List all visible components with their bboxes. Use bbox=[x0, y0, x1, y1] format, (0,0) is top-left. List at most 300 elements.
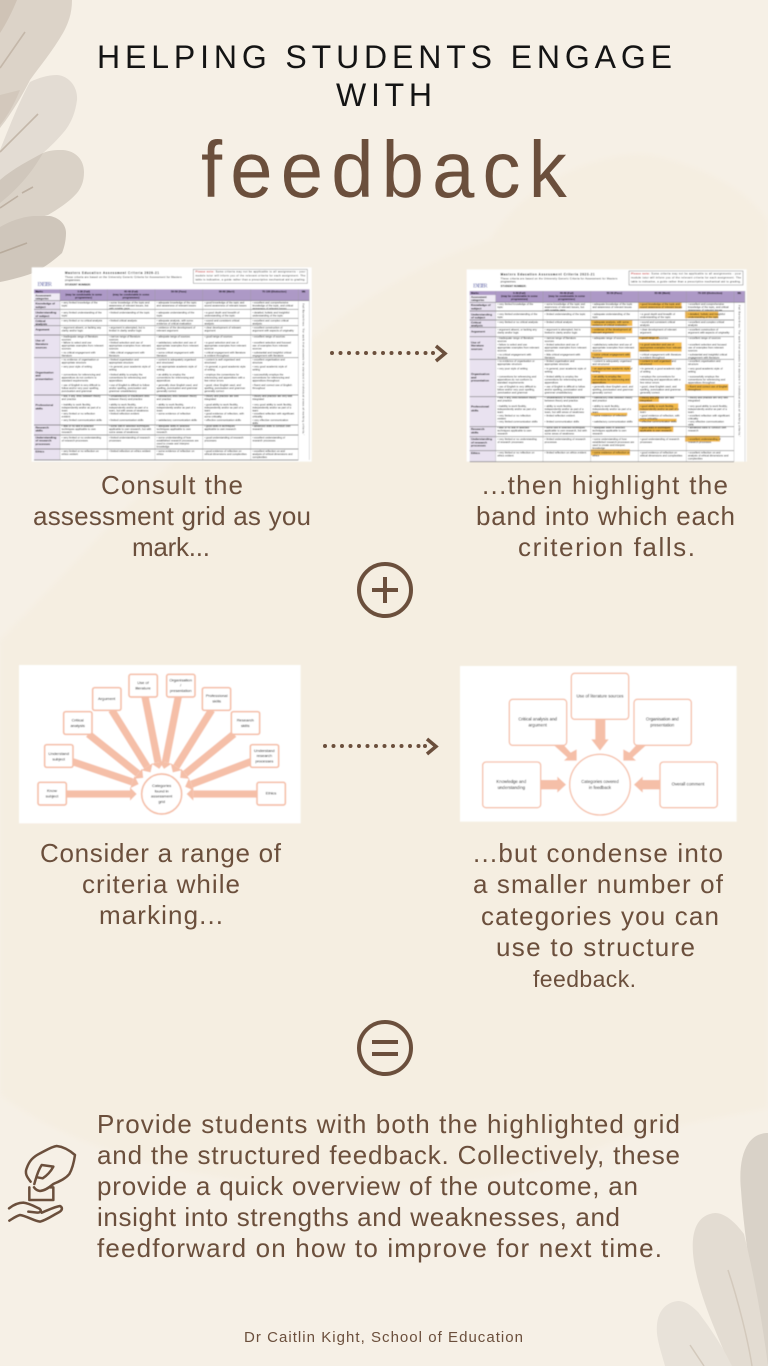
assessment grid: • limited understanding of the topic bbox=[109, 310, 150, 314]
highlighted assessment grid: • some skill in selected techniques bbox=[545, 426, 586, 430]
assessment grid: appendices do not conform to bbox=[62, 376, 97, 380]
assessment grid: of research processes bbox=[62, 438, 88, 442]
assessment grid: • limited selection and use of bbox=[109, 341, 143, 345]
highlighted assessment grid: • little critical engagement with bbox=[545, 352, 581, 356]
assessment grid: processes bbox=[204, 438, 217, 442]
assessment grid: of subject bbox=[35, 314, 49, 318]
highlighted assessment grid: throughout bbox=[688, 388, 701, 392]
assessment grid: literature bbox=[157, 354, 168, 358]
highlighted assessment grid: • good, clear English used, and bbox=[640, 385, 677, 389]
highlighted assessment grid: (may be condonable in some bbox=[548, 294, 585, 298]
assessment grid: • good range of sources bbox=[204, 334, 233, 338]
highlighted assessment grid: Professional bbox=[471, 405, 489, 409]
assessment grid: Please note: Some criteria may not be applicable to all assignments - your bbox=[195, 270, 305, 274]
title: HELPING STUDENTS ENGAGE bbox=[97, 39, 672, 75]
highlighted assessment grid: • very limited or no understanding bbox=[497, 437, 537, 441]
assessment grid: team bbox=[204, 408, 211, 412]
assessment grid bbox=[32, 267, 312, 462]
highlighted assessment grid: • content is well organised and bbox=[640, 359, 676, 363]
assessment grid: Use of bbox=[35, 339, 44, 343]
assessment grid: and practice bbox=[157, 397, 172, 401]
assessment grid: • very poor style of writing bbox=[62, 365, 92, 369]
highlighted assessment grid: literature bbox=[471, 344, 484, 348]
highlighted assessment grid: of research bbox=[471, 440, 487, 444]
assessment grid: argument with aspects of originality bbox=[252, 329, 294, 333]
caption: consult the grid: assessment grid as you bbox=[33, 501, 311, 531]
caption: condense into categories bbox=[473, 838, 724, 992]
assessment grid: Fail Borderlines: 'For work that exceeds the standard in individual areas of marking criteria.' bbox=[302, 303, 306, 435]
watercolour wash bbox=[0, 154, 768, 1187]
assessment grid: appropriate examples from relevant bbox=[62, 344, 104, 348]
diagram: categories in assessment grid: Argument bbox=[98, 696, 116, 701]
highlighted assessment grid: appropriate examples from relevant bbox=[592, 345, 634, 349]
highlighted assessment grid: • very effective communication bbox=[688, 420, 724, 424]
highlighted assessment grid: processes bbox=[640, 440, 653, 444]
assessment grid: Knowledge of bbox=[35, 301, 55, 305]
highlighted assessment grid: some areas of weakness bbox=[545, 432, 575, 436]
highlighted assessment grid: writing bbox=[592, 369, 601, 373]
highlighted assessment grid: • adequate range of sources bbox=[592, 336, 626, 340]
assessment grid: categories bbox=[35, 296, 49, 300]
assessment grid: and awareness of relevant issues bbox=[157, 303, 197, 307]
assessment grid: • good evidence of reflection, with bbox=[204, 412, 244, 416]
summary text: insight into strengths and weaknesses, and bbox=[97, 1202, 620, 1232]
assessment grid: sources bbox=[109, 347, 119, 351]
assessment grid: topic bbox=[157, 313, 163, 317]
highlighted assessment grid: • limited selection and use of bbox=[545, 342, 579, 346]
assessment grid: understanding of the topic bbox=[204, 313, 236, 317]
assessment grid: appropriate examples from relevant bbox=[204, 344, 246, 348]
assessment grid: conventions for referencing and bbox=[157, 376, 194, 380]
assessment grid: • very limited understanding of the bbox=[62, 310, 102, 314]
caption: condense into categories: categories you can bbox=[481, 901, 719, 931]
highlighted assessment grid: • good knowledge of the topic and bbox=[640, 302, 680, 306]
highlighted assessment grid: spelling, punctuation and grammar bbox=[592, 388, 633, 392]
highlighted assessment grid: literature bbox=[497, 355, 508, 359]
assessment grid: • substantial and insightful critical bbox=[252, 351, 292, 355]
highlighted assessment grid: • failure to select and use bbox=[497, 342, 528, 346]
assessment grid: • very limited knowledge of the bbox=[62, 300, 98, 304]
assessment grid: programmes. bbox=[65, 278, 81, 282]
assessment grid: • some evidence of reflection on bbox=[157, 449, 195, 453]
caption: condense into categories: ...but condense into bbox=[473, 838, 723, 868]
summary text: Provide students with both the highlighted grid bbox=[97, 1109, 680, 1139]
highlighted assessment grid: 70-100 (Distinction) bbox=[698, 291, 722, 295]
highlighted assessment grid: established research processes are bbox=[592, 440, 635, 444]
assessment grid: • theory and practice are very well bbox=[252, 394, 293, 398]
assessment grid: appendices bbox=[109, 379, 123, 383]
highlighted assessment grid: • limited critical analysis bbox=[545, 320, 573, 324]
dotted arrow: diagrams bbox=[323, 739, 436, 754]
assessment grid: independently and/or as part of a bbox=[252, 405, 292, 409]
assessment grid: • excellent organisation and bbox=[252, 357, 285, 361]
assessment grid: structured bbox=[204, 360, 217, 364]
highlighted assessment grid: • excellent organisation and bbox=[688, 359, 721, 363]
assessment grid: • very limited or no reflection on bbox=[62, 449, 99, 453]
assessment grid: • good skills in techniques bbox=[204, 424, 235, 428]
assessment grid: (may be condonable in some bbox=[65, 292, 102, 296]
caption: consider a range of criteria bbox=[40, 838, 282, 930]
assessment grid: literature bbox=[35, 342, 48, 346]
diagram: categories covered in feedback: understanding bbox=[498, 785, 526, 790]
assessment grid: conventions for referencing and bbox=[252, 376, 290, 380]
assessment grid: • detailed, holistic and insightful bbox=[252, 310, 290, 314]
assessment grid: • argument is attempted, but is bbox=[109, 326, 146, 330]
assessment grid: Research bbox=[35, 425, 49, 429]
highlighted assessment grid: evident bbox=[497, 416, 506, 420]
assessment grid: Understanding bbox=[35, 435, 57, 439]
assessment grid: Professional bbox=[35, 403, 53, 407]
assessment grid: topic bbox=[62, 313, 68, 317]
highlighted assessment grid: • adequate knowledge of the topic bbox=[592, 302, 633, 306]
caption: highlight the band: criterion falls. bbox=[518, 532, 695, 562]
caption: consult the grid bbox=[33, 470, 311, 562]
highlighted assessment grid: • some critical engagement with bbox=[592, 352, 630, 356]
assessment grid: Marks bbox=[35, 289, 44, 293]
assessment grid: • adequate analysis, with some bbox=[157, 318, 194, 322]
assessment grid: • very limited or no reflection bbox=[62, 412, 96, 416]
highlighted assessment grid: team bbox=[497, 410, 504, 414]
assessment grid: • very limited or no critical analysis bbox=[62, 318, 103, 322]
highlighted assessment grid: sources bbox=[688, 348, 698, 352]
diagram: categories in assessment grid: / bbox=[180, 683, 182, 688]
highlighted assessment grid: • a good selection and use of bbox=[640, 342, 674, 346]
assessment grid: • satisfactory selection and use of bbox=[157, 341, 196, 345]
highlighted assessment grid: These criteria are based on the University Generic Criteria for Assessment for Masters bbox=[501, 277, 618, 281]
assessment grid: sources bbox=[35, 345, 47, 349]
highlighted assessment grid: • ability to work flexibly, bbox=[545, 404, 572, 408]
highlighted assessment grid: • satisfactory links between theory bbox=[592, 396, 633, 400]
assessment grid: evidence of critical evaluation bbox=[157, 321, 192, 325]
highlighted assessment grid: 40-49 (Fail) bbox=[560, 291, 574, 295]
diagram: categories in assessment grid: Understand bbox=[254, 748, 275, 753]
assessment grid: • critical engagement with literature bbox=[204, 351, 246, 355]
assessment grid: ethics bbox=[157, 452, 164, 456]
assessment grid: EXETER bbox=[37, 282, 52, 288]
icon: equals in circle bbox=[359, 1022, 411, 1074]
highlighted assessment grid: skills bbox=[688, 423, 694, 427]
footer credit: Dr Caitlin Kight, School of Education bbox=[244, 1329, 523, 1346]
highlighted assessment grid: • adequate analysis, with some bbox=[592, 320, 629, 324]
assessment grid: • employs the conventions for bbox=[204, 373, 239, 377]
assessment grid: 40-49 (Fail) bbox=[124, 289, 138, 293]
assessment grid: • good understanding of research bbox=[204, 435, 244, 439]
diagram: categories covered in feedback: argument bbox=[529, 723, 548, 728]
assessment grid: grammar unsatisfactory bbox=[109, 389, 137, 393]
assessment grid: • excellent selection and focused bbox=[252, 341, 291, 345]
highlighted assessment grid: skills bbox=[471, 430, 479, 434]
assessment grid: • use of English is very difficult to bbox=[62, 383, 101, 387]
highlighted assessment grid: • conventions for referencing and bbox=[497, 374, 537, 378]
diagram: categories in assessment grid bbox=[19, 665, 301, 823]
assessment grid: • excellent reflection with significant bbox=[252, 412, 294, 416]
assessment grid: • limited reflection evident bbox=[109, 412, 139, 416]
assessment grid: Argument bbox=[35, 328, 49, 332]
highlighted assessment grid: • some understanding of how bbox=[592, 437, 627, 441]
highlighted assessment grid: • no critical engagement with bbox=[497, 352, 532, 356]
assessment grid: • excellent range of sources bbox=[252, 334, 286, 338]
highlighted assessment grid: • very limited communication skills bbox=[497, 420, 538, 424]
assessment grid: established research processes are bbox=[157, 438, 199, 442]
assessment grid: sources bbox=[157, 347, 167, 351]
highlighted assessment grid: appropriate examples from relevant bbox=[640, 345, 682, 349]
highlighted assessment grid: • very limited knowledge of the bbox=[497, 302, 534, 306]
highlighted assessment grid: and practice bbox=[592, 399, 607, 403]
assessment grid: and practice bbox=[62, 397, 77, 401]
assessment grid: research bbox=[62, 430, 73, 434]
diagram: categories covered in feedback bbox=[460, 666, 737, 822]
highlighted assessment grid: • employs the conventions for bbox=[640, 374, 675, 378]
highlighted assessment grid: limited in clarity and/or logic bbox=[545, 330, 578, 334]
highlighted assessment grid: • excellent and comprehensive bbox=[688, 302, 725, 306]
assessment grid: 50-59 (Pass) bbox=[171, 289, 187, 293]
assessment grid: of research bbox=[35, 439, 52, 443]
highlighted assessment grid: Fail Borderlines: 'For work that exceeds the standard in individual areas of marking criteria.' bbox=[737, 305, 741, 437]
highlighted assessment grid: sources bbox=[497, 339, 507, 343]
highlighted assessment grid: Organisation bbox=[471, 372, 490, 376]
assessment grid: • very limited communication skills bbox=[62, 418, 103, 422]
highlighted assessment grid: module tutor will inform you of the relevant criteria for each assignment. The bbox=[631, 275, 742, 279]
assessment grid: subject bbox=[35, 305, 46, 309]
assessment grid: appendices bbox=[157, 379, 171, 383]
highlighted assessment grid: with notable gaps bbox=[545, 308, 566, 312]
highlighted assessment grid: • adequate understanding of the bbox=[592, 312, 631, 316]
diagram: categories covered in feedback: Overall comment bbox=[672, 782, 705, 787]
assessment grid: module tutor will inform you of the relevant criteria for each assignment. The bbox=[195, 274, 306, 278]
highlighted assessment grid: • good evidence of reflection, with bbox=[640, 413, 680, 417]
diagram: categories in assessment grid: subject bbox=[52, 756, 66, 761]
highlighted assessment grid: appendices do not conform to bbox=[497, 377, 533, 381]
diagram: categories covered in feedback: Use of literature sources bbox=[577, 693, 623, 698]
diagram: categories in assessment grid: Critical bbox=[72, 718, 84, 723]
assessment grid: skills bbox=[252, 421, 259, 425]
assessment grid: (may be condonable in some bbox=[113, 292, 150, 296]
assessment grid: Understanding bbox=[35, 311, 57, 315]
highlighted assessment grid: appropriate examples from relevant bbox=[497, 345, 539, 349]
assessment grid: analysis bbox=[252, 321, 263, 325]
assessment grid: • advanced skills to conduct own bbox=[252, 424, 291, 428]
assessment grid: techniques applicable to own bbox=[157, 427, 191, 431]
highlighted assessment grid: applicable to own research bbox=[640, 429, 672, 433]
diagram: categories in assessment grid: analysis bbox=[70, 723, 85, 728]
assessment grid: • clear development of relevant bbox=[204, 326, 241, 330]
assessment grid: • some critical engagement with bbox=[157, 351, 195, 355]
assessment grid: and bbox=[35, 374, 41, 378]
assessment grid: • an ability to employ the bbox=[157, 373, 186, 377]
highlighted assessment grid: sources bbox=[471, 347, 483, 351]
highlighted assessment grid: • advanced skills to conduct own bbox=[688, 426, 727, 430]
highlighted assessment grid: • satisfactory communication skills bbox=[592, 420, 633, 424]
assessment grid: Organisation bbox=[35, 370, 54, 374]
highlighted assessment grid: Assessment bbox=[471, 295, 487, 299]
assessment grid: skills bbox=[35, 429, 43, 433]
assessment grid: • evidence of the development of bbox=[157, 326, 196, 330]
assessment grid: • some evidence of reflection bbox=[157, 412, 191, 416]
highlighted assessment grid: between theory and practice bbox=[545, 399, 579, 403]
highlighted assessment grid: analysis bbox=[640, 323, 650, 327]
highlighted assessment grid: skills bbox=[471, 408, 479, 412]
highlighted assessment grid: analysis of ethical dimensions and bbox=[688, 454, 729, 458]
assessment grid: appropriate structure bbox=[62, 360, 87, 364]
highlighted assessment grid: clarity and/or logic bbox=[497, 330, 519, 334]
highlighted assessment grid: 60-69 (Merit) bbox=[655, 291, 670, 295]
highlighted assessment grid: • limited communication skills bbox=[545, 420, 580, 424]
assessment grid: applicable to own research bbox=[204, 427, 236, 431]
diagram: categories covered in feedback: Categories covered bbox=[581, 779, 619, 784]
assessment grid: few minor errors bbox=[204, 379, 224, 383]
highlighted assessment grid: criticality bbox=[688, 416, 699, 420]
highlighted assessment grid: ethical dimensions and complexities bbox=[640, 454, 683, 458]
assessment grid: Critical bbox=[35, 319, 46, 323]
highlighted assessment grid: processes bbox=[471, 444, 486, 448]
assessment grid: These criteria are based on the University Generic Criteria for Assessment for Masters bbox=[65, 275, 182, 279]
highlighted assessment grid: evidence of critical evaluation bbox=[592, 323, 628, 327]
assessment grid: literature bbox=[62, 354, 73, 358]
highlighted assessment grid: • very limited understanding of the bbox=[497, 312, 538, 316]
highlighted assessment grid: referencing and appendices with a bbox=[640, 377, 681, 381]
highlighted assessment grid: relevant argument bbox=[592, 330, 614, 334]
highlighted assessment grid: team bbox=[592, 410, 599, 414]
caption: highlight the band: ...then highlight the bbox=[482, 470, 728, 500]
assessment grid: 0-39 (Fail) bbox=[77, 289, 90, 293]
highlighted assessment grid: writing bbox=[688, 369, 696, 373]
highlighted assessment grid: appropriate structure bbox=[545, 362, 570, 366]
highlighted assessment grid: • good evidence of reflection on bbox=[640, 451, 678, 455]
caption: condense into categories: use to structure bbox=[496, 932, 695, 962]
diagram: categories in assessment grid: Use of bbox=[137, 680, 150, 685]
highlighted assessment grid: independently and/or as part of a bbox=[688, 407, 727, 411]
highlighted assessment grid: Use of bbox=[471, 340, 480, 344]
assessment grid: standard requirements bbox=[62, 379, 89, 383]
highlighted assessment grid: • limited reflection evident bbox=[545, 413, 575, 417]
assessment grid: follow and/or very poor spelling, bbox=[62, 386, 99, 390]
highlighted assessment grid: • excellent reflection with significant bbox=[688, 413, 730, 417]
assessment grid: presentation bbox=[35, 377, 53, 381]
assessment grid: • use of English is difficult to follow bbox=[109, 383, 150, 387]
assessment grid: • a good selection and use of bbox=[204, 341, 239, 345]
highlighted assessment grid: • limited understanding of research bbox=[545, 437, 586, 441]
highlighted assessment grid: • adequate skills in selected bbox=[592, 426, 626, 430]
caption: highlight the band: band into which each bbox=[476, 501, 735, 531]
highlighted assessment grid: and/or spelling, punctuation and bbox=[545, 388, 583, 392]
diagram: categories covered in feedback: in feedback bbox=[589, 785, 612, 790]
assessment grid: analysis of ethical dimensions and bbox=[252, 452, 293, 456]
highlighted assessment grid: of research processes bbox=[497, 440, 524, 444]
assessment grid: • limited critical analysis bbox=[109, 318, 138, 322]
highlighted assessment grid: • argument is attempted, but is bbox=[545, 327, 581, 331]
assessment grid: literature bbox=[109, 354, 120, 358]
assessment grid: • in general, poor academic style of bbox=[109, 365, 151, 369]
highlighted assessment grid: argument bbox=[640, 330, 651, 334]
highlighted assessment grid: ethics bbox=[592, 454, 600, 458]
highlighted assessment grid: knowledge bbox=[592, 446, 606, 450]
highlighted assessment grid: Critical bbox=[471, 321, 481, 325]
highlighted assessment grid: use of examples from relevant bbox=[688, 345, 724, 349]
highlighted assessment grid: generally correct bbox=[592, 391, 612, 395]
summary text bbox=[97, 1109, 680, 1263]
assessment grid: • good knowledge of the topic and bbox=[204, 300, 245, 304]
assessment grid: • good ability to work flexibly, bbox=[204, 402, 238, 406]
assessment grid: • some knowledge of the topic and bbox=[109, 300, 150, 304]
assessment grid: • in general, a good academic style bbox=[204, 365, 246, 369]
assessment grid: • little or no skill in selected bbox=[62, 424, 94, 428]
highlighted assessment grid: • limited ability to employ the bbox=[545, 374, 579, 378]
assessment grid: • an appropriate academic style of bbox=[157, 365, 197, 369]
highlighted assessment grid: • good skills in techniques bbox=[640, 426, 671, 430]
highlighted assessment grid: analysis bbox=[688, 323, 698, 327]
highlighted assessment grid: • argument absent, or lacking any bbox=[497, 327, 537, 331]
highlighted assessment grid: • good understanding of research bbox=[640, 437, 680, 441]
highlighted assessment grid: • in general, poor academic style of bbox=[545, 366, 586, 370]
highlighted assessment grid: • detailed, holistic and insightful bbox=[688, 312, 725, 316]
assessment grid: • unsatisfactory or insufficient links bbox=[109, 394, 150, 398]
highlighted assessment grid: • some evidence of reflection bbox=[592, 413, 627, 417]
assessment grid: team bbox=[62, 408, 68, 412]
highlighted assessment grid: • evidence of the development of bbox=[592, 327, 631, 331]
diagram: categories in assessment grid: subject bbox=[46, 793, 59, 798]
assessment grid: programmes) bbox=[123, 295, 140, 299]
highlighted assessment grid: structure bbox=[688, 362, 699, 366]
highlighted assessment grid: analysis bbox=[471, 324, 483, 328]
highlighted assessment grid: • very good ability to work flexibly, bbox=[688, 404, 728, 408]
assessment grid: awareness of relevant issues bbox=[252, 306, 287, 310]
highlighted assessment grid: independently and/or as part of a bbox=[592, 407, 632, 411]
highlighted assessment grid: • excellent understanding of bbox=[688, 437, 721, 441]
highlighted assessment grid: awareness of relevant issues, but bbox=[545, 305, 584, 309]
highlighted assessment grid: follow and/or very poor spelling, bbox=[497, 388, 535, 392]
highlighted assessment grid: • limited understanding of the topic bbox=[545, 312, 586, 316]
highlighted assessment grid: Mk bbox=[737, 291, 742, 295]
diagram: categories in assessment grid: Professional bbox=[206, 693, 228, 698]
assessment grid: • inability to work flexibly, bbox=[62, 402, 91, 406]
assessment grid: • very limited or no understanding bbox=[62, 435, 102, 439]
assessment grid: analysis bbox=[35, 322, 47, 326]
highlighted assessment grid: used to create and interpret bbox=[592, 443, 625, 447]
assessment grid: integrated bbox=[204, 397, 217, 401]
highlighted assessment grid: table is indicative, a guide rather than a prescriptive mechanical aid to grading. bbox=[631, 279, 741, 283]
highlighted assessment grid: • few, if any, links between theory bbox=[497, 396, 537, 400]
highlighted assessment grid: and structured bbox=[592, 362, 610, 366]
highlighted assessment grid bbox=[467, 269, 747, 462]
highlighted assessment grid: Ethics bbox=[471, 451, 480, 455]
highlighted assessment grid: of subject bbox=[471, 316, 485, 320]
highlighted assessment grid: STUDENT NUMBER: bbox=[501, 284, 527, 288]
assessment grid: • sound and consistent critical bbox=[204, 318, 240, 322]
assessment grid: team, but with areas of weakness bbox=[109, 408, 149, 412]
highlighted assessment grid: • very limited or no critical analysis bbox=[497, 320, 538, 324]
highlighted assessment grid: Masters Education Assessment Criteria 2020-21 bbox=[501, 273, 595, 277]
assessment grid: spelling, punctuation and grammar bbox=[157, 386, 198, 390]
highlighted assessment grid: conventions for referencing and bbox=[688, 377, 726, 381]
assessment grid: between theory and practice bbox=[109, 397, 143, 401]
summary text: provide a quick overview of the outcome, an bbox=[97, 1171, 638, 1201]
highlighted assessment grid: topic bbox=[497, 315, 504, 319]
highlighted assessment grid: • fluent and correct use of English bbox=[688, 385, 728, 389]
assessment grid: • little critical engagement with bbox=[109, 351, 145, 355]
assessment grid: • excellent understanding of bbox=[252, 435, 285, 439]
highlighted assessment grid: independently and/or as part of a bbox=[545, 407, 584, 411]
assessment grid: • generally clear English used, and bbox=[157, 383, 198, 387]
highlighted assessment grid: research bbox=[688, 429, 699, 433]
highlighted assessment grid: programmes. bbox=[501, 280, 517, 284]
highlighted assessment grid: and awareness of relevant issues bbox=[592, 305, 632, 309]
assessment grid: • satisfactory links between theory bbox=[157, 394, 197, 398]
caption: condense into categories: a smaller number of bbox=[473, 869, 724, 899]
dotted arrow: grid bbox=[330, 346, 445, 361]
assessment grid: sources bbox=[109, 337, 119, 341]
highlighted assessment grid: 0-39 (Fail) bbox=[513, 291, 526, 295]
highlighted assessment grid: topic bbox=[497, 305, 504, 309]
